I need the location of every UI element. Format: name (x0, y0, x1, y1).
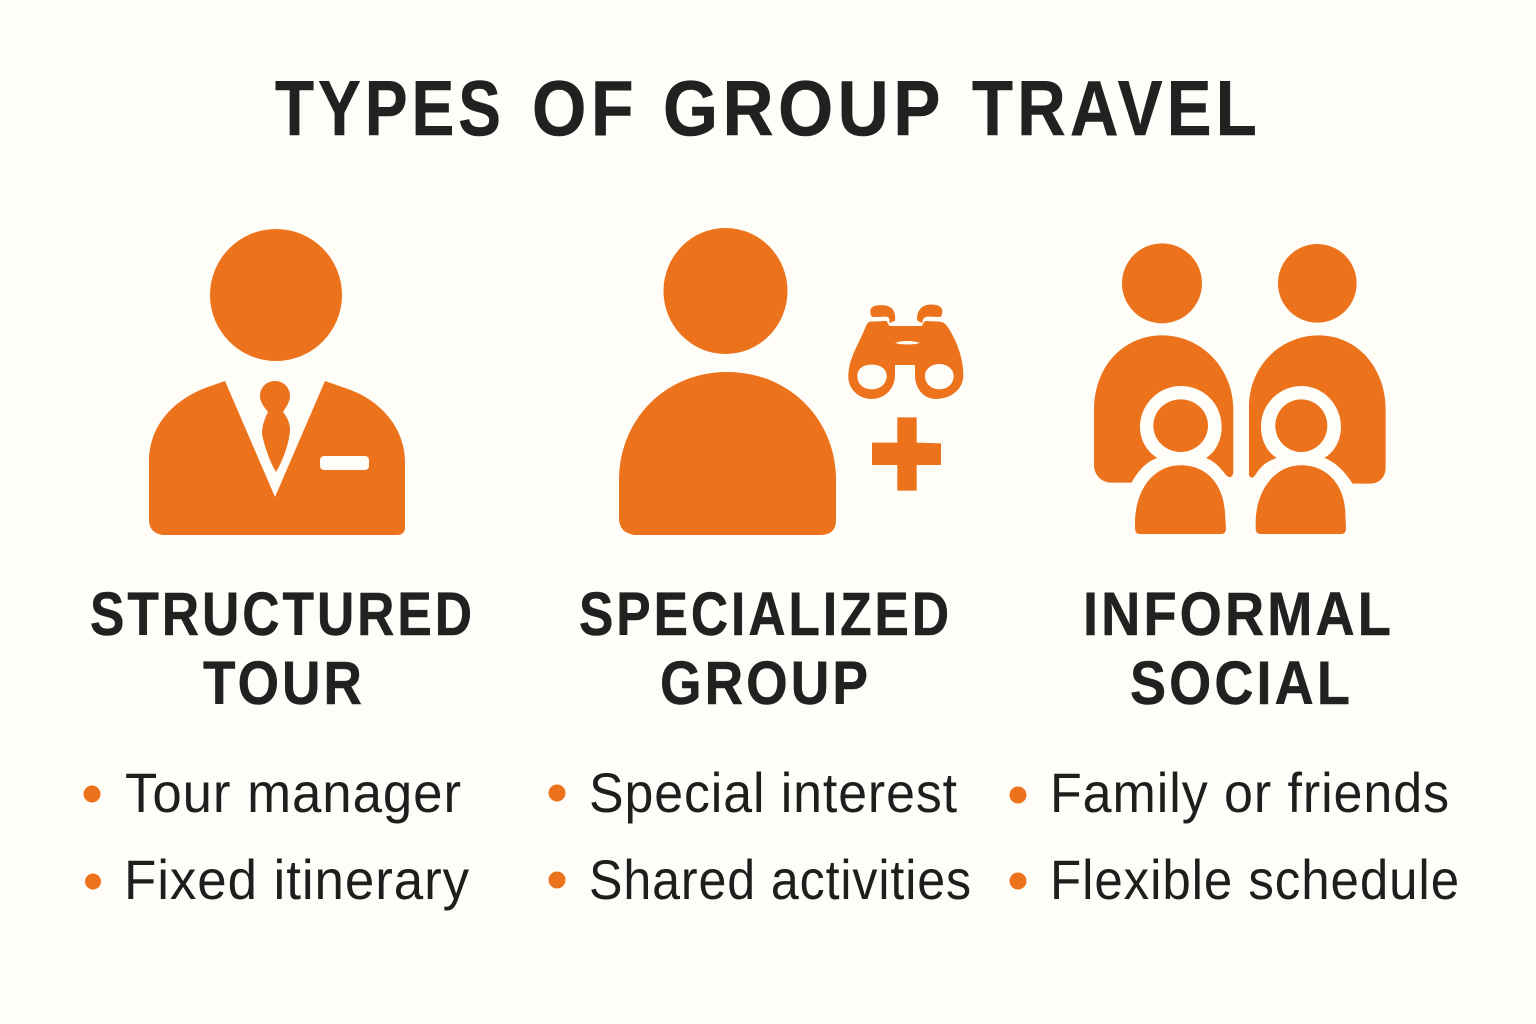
list: informal social features: Flexible schedule (1050, 848, 1460, 911)
list: structured tour features: Tour manager (125, 761, 462, 824)
heading: structured tour: STRUCTURED (90, 580, 475, 648)
title: TYPES (275, 64, 505, 152)
list: structured tour features: Fixed itinerary (124, 848, 470, 911)
icon: person with binoculars and plus (619, 228, 963, 535)
heading: structured tour: TOUR (203, 649, 365, 717)
panel: informal social (1010, 243, 1460, 911)
icon: family group (1094, 243, 1386, 534)
heading: structured tour (90, 580, 475, 717)
heading: specialized group (579, 580, 952, 717)
panel: structured tour (84, 229, 475, 911)
list: informal social features: Family or friends (1050, 761, 1450, 824)
list: structured tour features (84, 761, 470, 911)
title: OF (532, 64, 638, 152)
title: TRAVEL (972, 64, 1261, 152)
heading: informal social (1083, 580, 1394, 717)
panel: specialized group (548, 228, 972, 911)
heading: informal social: INFORMAL (1083, 580, 1394, 648)
heading: specialized group: GROUP (660, 649, 871, 717)
list: specialized group features (548, 761, 972, 911)
title: GROUP (663, 64, 945, 152)
list: specialized group features: Special interest (589, 761, 958, 824)
icon: tour manager in suit (149, 229, 405, 535)
heading: informal social: SOCIAL (1130, 649, 1353, 717)
list: informal social features (1010, 761, 1460, 911)
title (275, 64, 1261, 152)
list: specialized group features: Shared activities (589, 848, 972, 911)
heading: specialized group: SPECIALIZED (579, 580, 952, 648)
